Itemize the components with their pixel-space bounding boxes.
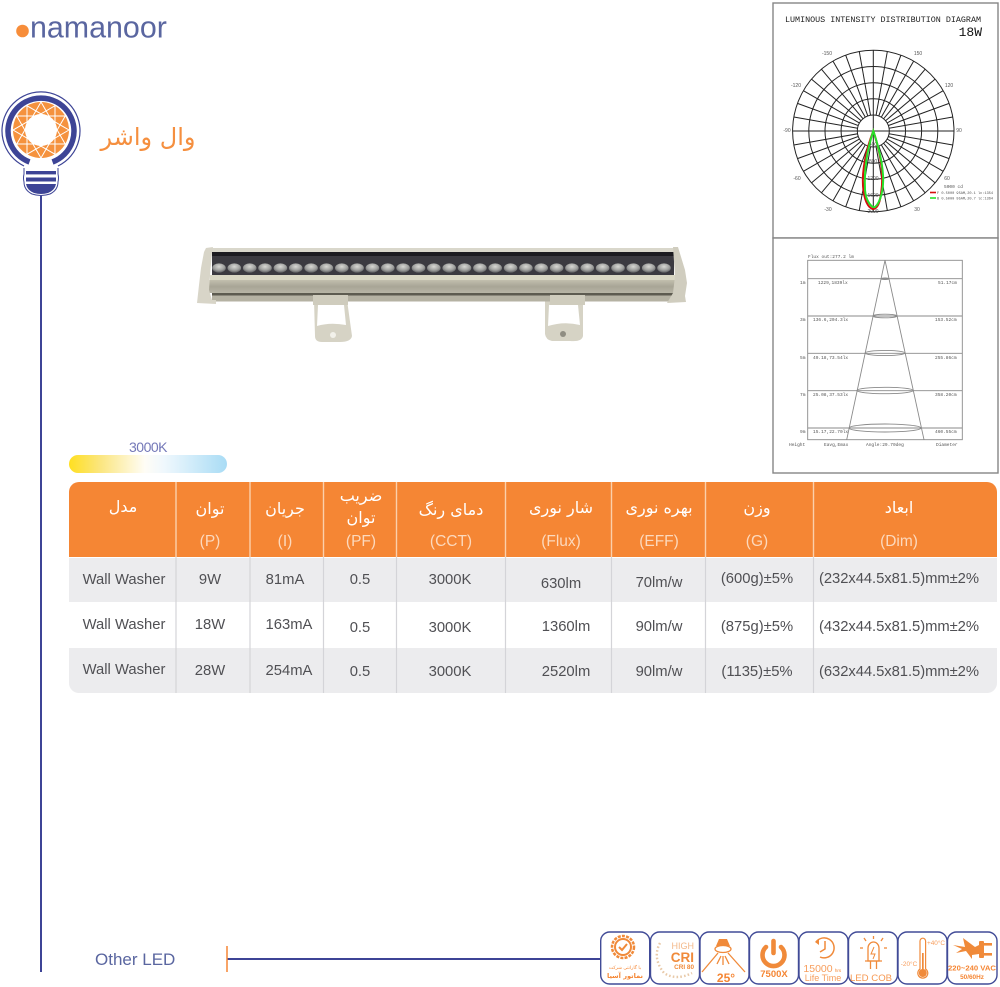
polar chart: 800 <box>869 159 877 165</box>
end cap left <box>197 247 216 304</box>
cone labels: 1m <box>800 280 806 286</box>
table header labels: (Dim) <box>880 533 918 550</box>
cone labels: 9m <box>800 429 806 435</box>
table header labels: دمای رنگ <box>419 500 483 520</box>
table row: 18W: 0.5 <box>350 620 370 636</box>
table backgrounds <box>69 482 997 693</box>
cone labels: 153.52cm <box>935 317 957 323</box>
icon: warranty badge: نماتور آسیا <box>607 971 643 980</box>
table row: 9W: 630lm <box>541 576 581 592</box>
table header labels: جریان <box>265 499 305 519</box>
cone labels: 136.6,204.3lx <box>813 317 848 323</box>
table row: 9W: Wall Washer <box>83 572 165 588</box>
cone labels: 1229,1839lx <box>818 280 848 286</box>
table row: 18W: (432x44.5x81.5)mm±2% <box>819 619 979 635</box>
polar legend: F 0.5000 95AM,20.1 lc:1354 <box>937 191 993 196</box>
footer label: other LED: Other LED <box>95 950 175 969</box>
polar chart: 30 <box>914 207 920 213</box>
cone labels: 51.17cm <box>938 280 957 286</box>
table header labels: توان <box>196 499 224 519</box>
icon: life time: hrs <box>835 968 842 973</box>
polar chart: -30 <box>824 207 832 213</box>
table row: 9W: (600g)±5% <box>721 571 793 587</box>
polar legend: 5000 cd <box>944 184 963 190</box>
table header labels: مدل <box>109 497 137 516</box>
panel: illuminance cone diagram <box>773 238 998 473</box>
cone labels: Height <box>789 442 806 448</box>
icon: temperature range: +40°C <box>927 939 945 947</box>
icon: light bulb logo <box>2 92 80 196</box>
cone labels: Angle:29.70deg <box>866 442 904 448</box>
table header labels: ضریب <box>340 486 382 506</box>
polar legend: B 0.5000 95AM,20.7 lc:1364 <box>937 196 993 202</box>
table row: 18W: 90lm/w <box>636 619 683 635</box>
diagram title: LUMINOUS INTENSITY DISTRIBUTION DIAGRAM <box>785 15 981 25</box>
end cap right <box>667 247 687 303</box>
color temperature label: 3000K <box>129 439 168 455</box>
table row: 28W: 2520lm <box>542 664 590 680</box>
polar chart: -90 <box>783 128 791 134</box>
cone labels: Diameter <box>936 442 958 448</box>
table header labels: (CCT) <box>430 533 472 550</box>
icon: life time: Life Time <box>805 973 841 983</box>
table header labels: بهره نوری <box>625 498 693 518</box>
table row: 28W: (1135)±5% <box>721 664 793 680</box>
logo: namanoor: namanoor <box>30 10 167 44</box>
icon: high CRI <box>650 932 700 984</box>
icon: power cycles <box>750 932 798 984</box>
polar chart: 90 <box>956 128 962 134</box>
title: wall washer: وال واشر <box>100 123 195 151</box>
table row: 28W: 28W <box>195 663 225 679</box>
icon: voltage plug: 220~240 VAC <box>948 964 996 972</box>
icon: beam angle 25 <box>700 932 749 985</box>
table row: 9W: 70lm/w <box>636 575 683 591</box>
icon: high CRI: HIGH <box>672 941 694 951</box>
polar chart: -150 <box>822 51 832 57</box>
polar chart: -120 <box>791 83 801 89</box>
panel: illuminance cone diagram: Flux out:277.2 lm <box>808 254 854 260</box>
polar chart: 60 <box>944 176 950 182</box>
table header labels: شار نوری <box>529 498 593 518</box>
footer connector line <box>227 946 601 972</box>
table row: 18W: 3000K <box>429 620 472 636</box>
cone labels: 460.55cm <box>935 429 957 435</box>
wattage label: 18W <box>959 25 982 40</box>
cone labels: 15.17,22.70lx <box>813 429 848 435</box>
icon: power cycles: 7500X <box>760 969 788 980</box>
panel: luminous intensity diagram <box>773 3 998 238</box>
specification table <box>69 482 997 693</box>
icon: life time <box>799 932 848 984</box>
table row: 28W: 254mA <box>266 663 313 679</box>
table row: 28W <box>83 662 979 680</box>
table header labels: (G) <box>746 533 768 550</box>
polar chart: 400 <box>869 142 877 148</box>
cone labels: 3m <box>800 317 806 323</box>
polar chart <box>783 50 962 215</box>
cone labels: 49.18,73.54lx <box>813 355 848 361</box>
cone chart <box>808 260 962 440</box>
bracket right <box>545 295 585 341</box>
table row: 28W: 90lm/w <box>636 664 683 680</box>
table row: 9W: 0.5 <box>350 572 370 588</box>
icon: life time: 15000 <box>803 963 833 975</box>
polar chart: 1600 <box>867 193 879 199</box>
table row: 9W <box>83 571 979 592</box>
table row: 18W: 163mA <box>266 617 313 633</box>
icon: temperature range <box>898 932 947 984</box>
table row: 9W: (232x44.5x81.5)mm±2% <box>819 571 979 587</box>
icon: high CRI: CRI <box>671 950 694 965</box>
LED lenses <box>212 263 671 273</box>
product image: wall washer fixture <box>197 247 687 342</box>
cone labels: Eavg,Emax <box>824 442 849 448</box>
cone labels <box>789 280 958 448</box>
cone labels: 5m <box>800 355 806 361</box>
table row: 18W: 1360lm <box>542 619 590 635</box>
icon: warranty badge <box>601 932 650 984</box>
polar chart: 1200 <box>867 176 879 182</box>
polar chart: -60 <box>793 176 801 182</box>
table row: 28W: 3000K <box>429 664 472 680</box>
icon: LED COB <box>848 932 898 984</box>
table header labels: (PF) <box>346 533 376 550</box>
table row: 18W: (875g)±5% <box>721 619 793 635</box>
table header labels: وزن <box>743 498 771 518</box>
icon: warranty badge: با گارانتی شرکت <box>609 964 641 971</box>
table header labels: (Flux) <box>541 533 581 550</box>
icon: temperature range: -20°C <box>901 960 918 968</box>
table row: 28W: (632x44.5x81.5)mm±2% <box>819 664 979 680</box>
polar legend <box>930 184 993 202</box>
cone labels: 255.86cm <box>935 355 957 361</box>
cone labels: 7m <box>800 392 806 398</box>
table header labels: (I) <box>278 533 292 550</box>
icon: LED COB: LED COB <box>850 973 892 984</box>
vertical timeline line <box>40 196 42 972</box>
icon: voltage plug <box>948 932 997 984</box>
table row: 18W: Wall Washer <box>83 617 165 633</box>
table row: 18W <box>83 617 979 636</box>
table header labels: (EFF) <box>639 533 679 550</box>
table row: 9W: 9W <box>199 572 221 588</box>
table row: 28W: Wall Washer <box>83 662 165 678</box>
polar chart: 2000 <box>867 209 879 215</box>
icon: beam angle 25: 25° <box>717 971 735 985</box>
table row: 9W: 3000K <box>429 572 472 588</box>
table row: 18W: 18W <box>195 617 225 633</box>
table header labels: ابعاد <box>885 498 913 517</box>
icon: high CRI: CRI 80 <box>674 964 694 971</box>
table header labels: توان <box>347 508 375 528</box>
table row: 9W: 81mA <box>266 572 304 588</box>
bracket left <box>313 295 352 342</box>
color temperature gradient bar <box>69 455 227 473</box>
cone labels: 25.08,37.53lx <box>813 392 848 398</box>
icon: voltage plug: 50/60Hz <box>960 974 984 981</box>
polar chart: 120 <box>945 83 953 89</box>
table header labels <box>109 486 918 550</box>
polar chart: 150 <box>914 51 922 57</box>
cone labels: 358.20cm <box>935 392 957 398</box>
table header labels: (P) <box>200 533 220 550</box>
table row: 28W: 0.5 <box>350 664 370 680</box>
